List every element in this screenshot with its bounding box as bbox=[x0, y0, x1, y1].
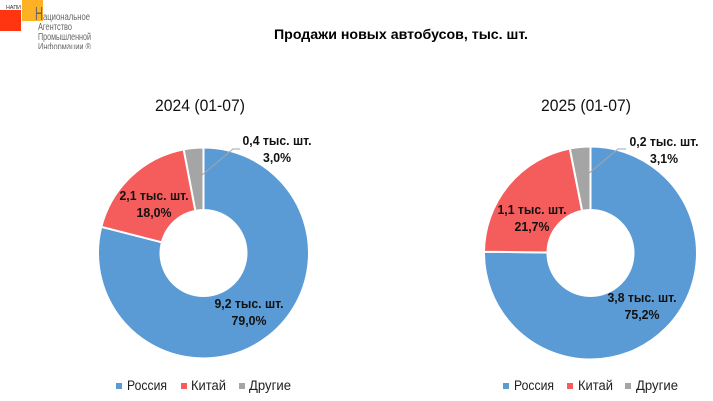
legend: 2024: Другие bbox=[249, 378, 291, 393]
label: 2025 China: 1,1 тыс. шт. bbox=[498, 202, 566, 217]
label: 2025 other: 3,1% bbox=[650, 151, 678, 166]
logo: Промышленной bbox=[38, 32, 91, 43]
logo: ациональное bbox=[43, 12, 90, 23]
label: 2025 Russia: 3,8 тыс. шт. bbox=[608, 290, 676, 305]
logo: Н bbox=[35, 4, 43, 24]
donut: 2025 bbox=[484, 146, 697, 360]
title: Продажи новых автобусов, тыс. шт. bbox=[274, 26, 528, 42]
leader line: 2025 other bbox=[588, 149, 626, 174]
legend: 2025: Россия bbox=[514, 378, 554, 393]
legend: 2024: Россия bbox=[127, 378, 167, 393]
label: 2025 other bbox=[630, 134, 698, 166]
label: 2025 China: 21,7% bbox=[514, 219, 550, 234]
label: 2024 China: 2,1 тыс. шт. bbox=[120, 188, 188, 203]
label: 2024 other: 3,0% bbox=[263, 150, 291, 165]
label: 2025 Russia: 75,2% bbox=[624, 307, 660, 322]
panel: 2024 donut chart bbox=[98, 96, 311, 393]
label: 2025 other: 0,2 тыс. шт. bbox=[630, 134, 698, 149]
label: 2024 China bbox=[120, 188, 188, 220]
legend: 2024: Китай bbox=[191, 378, 226, 393]
donut: 2024 bbox=[98, 148, 309, 358]
panel: 2025 donut chart bbox=[484, 96, 698, 393]
logo: НАПИ bbox=[6, 5, 21, 11]
legend: 2025: Другие bbox=[636, 378, 678, 393]
leader line: 2024 other bbox=[202, 149, 240, 175]
label: 2025 China bbox=[498, 202, 566, 234]
logo: Агентство bbox=[38, 22, 72, 33]
label: 2025 Russia bbox=[608, 290, 676, 322]
logo bbox=[0, 0, 91, 53]
label: 2024 other: 0,4 тыс. шт. bbox=[242, 133, 312, 148]
label: 2024 Russia bbox=[214, 296, 284, 328]
label: 2024 other bbox=[242, 133, 312, 165]
chart heading: 2024: 2024 (01-07) bbox=[155, 96, 245, 115]
legend: 2024 bbox=[116, 378, 291, 393]
label: 2024 Russia: 9,2 тыс. шт. bbox=[214, 296, 284, 311]
label: 2024 Russia: 79,0% bbox=[232, 313, 267, 328]
legend: 2025 bbox=[503, 378, 678, 393]
chart heading: 2025: 2025 (01-07) bbox=[541, 96, 631, 115]
label: 2024 China: 18,0% bbox=[136, 205, 172, 220]
legend: 2025: Китай bbox=[578, 378, 613, 393]
